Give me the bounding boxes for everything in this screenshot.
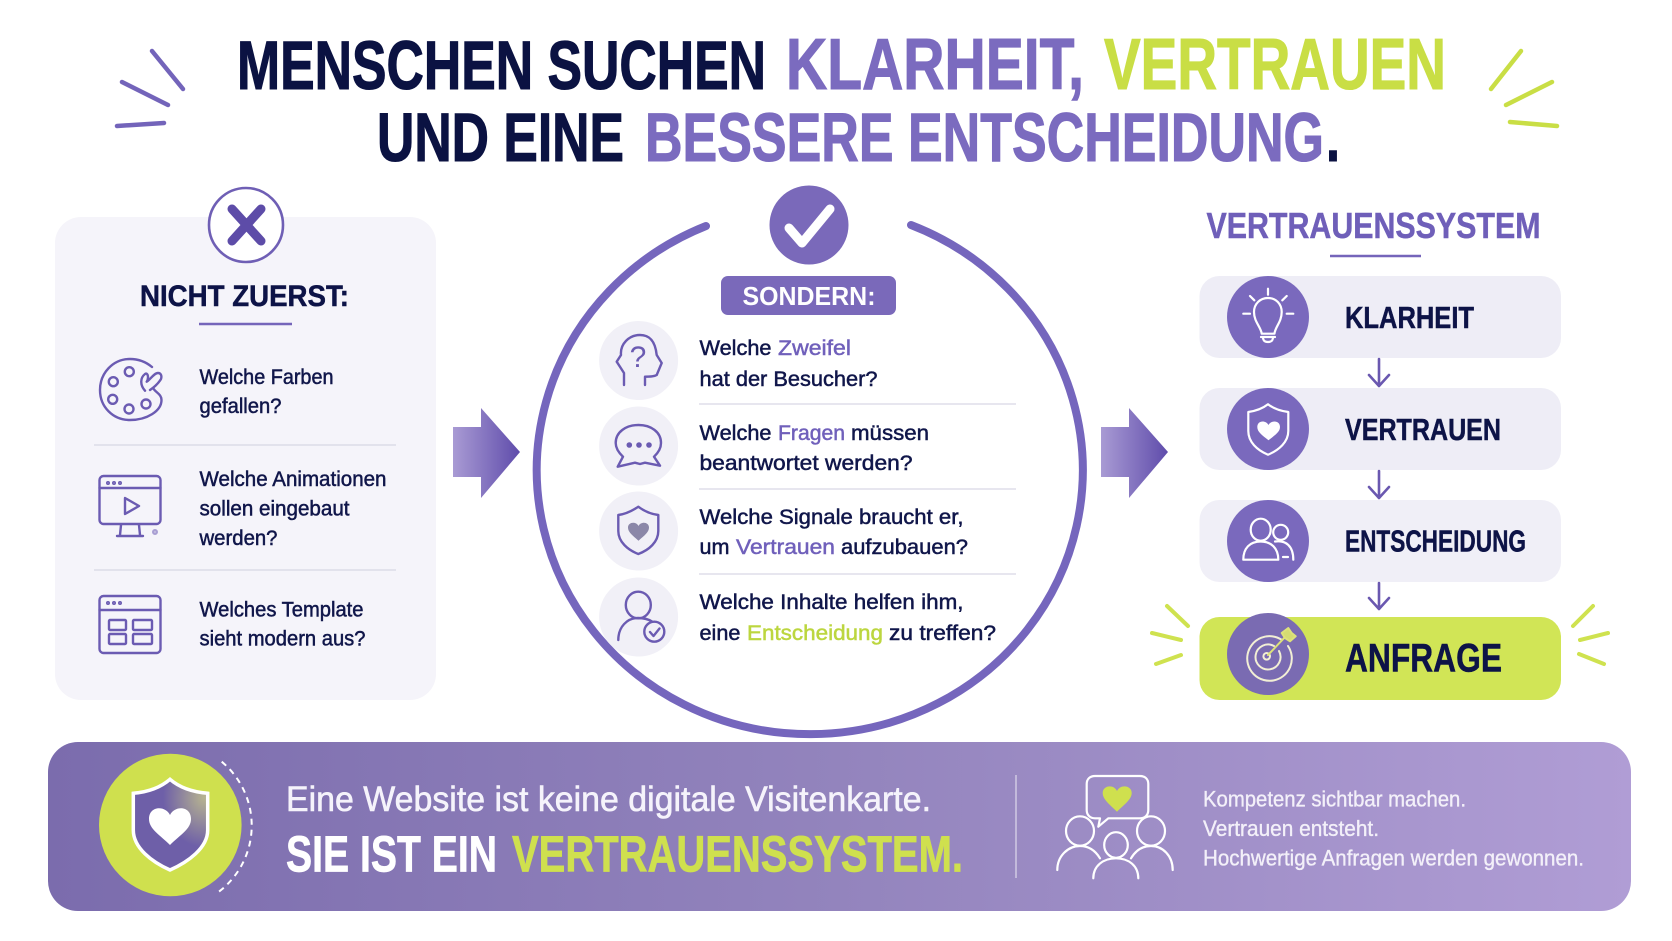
text: banner headline: SIE IST EIN — [286, 826, 497, 882]
icon: head question — [599, 321, 678, 400]
arrow: left panel to circle — [453, 408, 520, 498]
text: farben — [200, 365, 334, 418]
text: inhalte: eine — [700, 621, 740, 645]
text: farben: Welche Farben — [200, 365, 334, 389]
text: zweifel: Welche — [700, 336, 772, 360]
title: UND EINE — [377, 99, 624, 176]
text: template: Welches Template — [200, 598, 364, 622]
text: fragen — [700, 421, 929, 475]
title: . — [1326, 99, 1340, 176]
text: zweifel — [700, 336, 878, 391]
text: inhalte: zu treffen? — [889, 621, 996, 645]
title — [237, 25, 1446, 176]
text: animationen: Welche Animationen — [200, 467, 386, 491]
text: inhalte: Entscheidung — [747, 621, 883, 645]
text: template — [200, 598, 366, 650]
row: entscheidung: ENTSCHEIDUNG — [1345, 524, 1526, 558]
icon: shield heart — [599, 492, 678, 570]
text: signale: Welche Signale braucht er, — [700, 505, 964, 529]
text: banner right: Kompetenz sichtbar machen. — [1203, 786, 1466, 812]
sparks around anfrage — [1152, 606, 1608, 664]
row: anfrage — [1200, 613, 1561, 700]
text: banner right: Hochwertige Anfragen werden gewonnen. — [1203, 846, 1584, 870]
text: banner right — [1203, 786, 1584, 870]
icon: palette — [100, 359, 162, 420]
text: inhalte: Welche Inhalte helfen ihm, — [700, 590, 964, 614]
text: animationen: werden? — [199, 526, 278, 550]
icon: speech bubble — [599, 406, 678, 486]
title: MENSCHEN SUCHEN — [237, 27, 766, 104]
decorative sparks left of title — [117, 51, 183, 126]
row: entscheidung — [1200, 500, 1561, 582]
text: fragen: beantwortet werden? — [700, 451, 913, 475]
text: animationen: sollen eingebaut — [200, 496, 350, 520]
text: inhalte — [700, 590, 996, 645]
heading: nicht zuerst: NICHT ZUERST: — [140, 280, 349, 313]
icon: lime shield badge — [99, 754, 252, 896]
text: banner headline — [286, 780, 963, 882]
panel: bottom banner — [48, 742, 1631, 911]
arrow: circle to system — [1101, 408, 1168, 498]
title: KLARHEIT, — [786, 25, 1084, 105]
icon: monitor with play — [100, 476, 160, 536]
circle outline — [537, 225, 1083, 734]
text: banner right: Vertrauen entsteht. — [1203, 816, 1379, 841]
text: signale: aufzubauen? — [841, 535, 968, 559]
title: BESSERE ENTSCHEIDUNG — [645, 99, 1324, 176]
row: anfrage: ANFRAGE — [1345, 636, 1502, 680]
title: VERTRAUEN — [1104, 25, 1446, 105]
arrow: klarheit to vertrauen — [1369, 359, 1389, 386]
text: template: sieht modern aus? — [200, 626, 366, 650]
text: fragen: müssen — [851, 421, 929, 445]
text: fragen: Fragen — [778, 421, 845, 445]
text: zweifel: Zweifel — [778, 336, 851, 360]
text: banner headline: Eine Website ist keine digitale Visitenkarte. — [286, 780, 931, 819]
text: fragen: Welche — [700, 421, 772, 445]
text: signale: Vertrauen — [736, 535, 835, 559]
label: sondern — [721, 276, 896, 315]
icon: person check — [599, 578, 678, 656]
icon: head question: ? — [630, 341, 646, 374]
icon: check badge — [770, 186, 848, 264]
icon: template — [100, 596, 160, 653]
text: animationen — [199, 467, 386, 550]
text: banner headline: VERTRAUENSSYSTEM. — [512, 826, 963, 882]
arrow: vertrauen to entscheidung — [1369, 471, 1389, 498]
panel: nicht zuerst — [55, 188, 436, 700]
text: zweifel: hat der Besucher? — [700, 367, 878, 391]
icon: x circle — [209, 188, 283, 262]
row: klarheit — [1200, 276, 1561, 358]
panel: sondern circle — [537, 186, 1083, 734]
icon: community with heart bubble — [1057, 776, 1173, 878]
heading: vertrauenssystem: VERTRAUENSSYSTEM — [1206, 205, 1540, 246]
panel: vertrauenssystem — [1152, 205, 1608, 700]
text: signale: um — [700, 535, 730, 559]
row: klarheit: KLARHEIT — [1345, 300, 1474, 335]
row: vertrauen — [1200, 388, 1561, 470]
row: vertrauen: VERTRAUEN — [1345, 412, 1501, 447]
arrow: entscheidung to anfrage — [1369, 583, 1389, 609]
text: signale — [700, 505, 968, 559]
label: sondern: SONDERN: — [742, 281, 876, 311]
text: farben: gefallen? — [200, 394, 282, 418]
decorative sparks right of title — [1491, 51, 1557, 126]
